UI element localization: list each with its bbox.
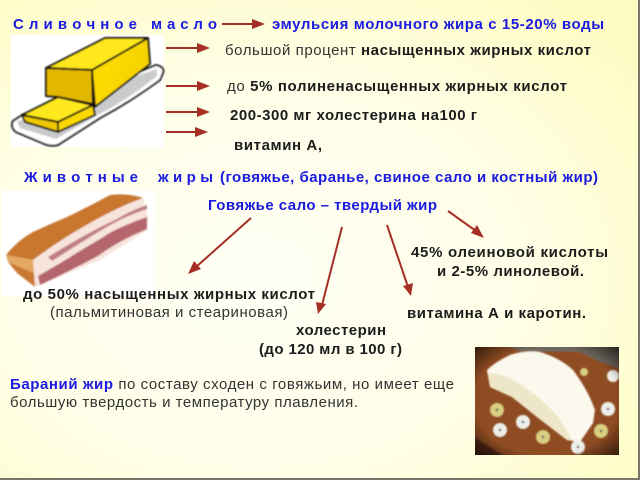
- text: up to 50 percent saturated acids: (пальмитиновая и стеариновая): [50, 304, 288, 321]
- image: mutton fat on a plate: [475, 345, 621, 456]
- text: cholesterol in tallow: [259, 322, 402, 358]
- heading: butter: [13, 16, 217, 33]
- heading: butter: С л и в о ч н о е: [13, 16, 137, 33]
- arrow: to saturated acids: [188, 218, 251, 274]
- subheading: beef tallow: Говяжье сало – твердый жир: [208, 197, 437, 214]
- arrow: to oleic acid: [448, 211, 484, 238]
- text: oleic and linoleic acids: [411, 244, 608, 280]
- text: cholesterol in butter: 200-300 мг холестерина на100 г: [230, 107, 477, 124]
- text: saturated acids: большой процент насыщенных жирных кислот: [225, 42, 591, 59]
- image: slab of lard: [1, 191, 155, 296]
- text: up to 50 percent saturated acids: [23, 286, 315, 321]
- arrow: to cholesterol: [316, 227, 342, 314]
- text: oleic and linoleic acids: 45% олеиновой кислоты: [411, 244, 608, 261]
- heading: animal fats: Ж и в о т н ы е: [23, 169, 138, 186]
- heading: emulsion definition: эмульсия молочного жира с 15-20% воды: [272, 16, 604, 33]
- arrow: butter fact 3: [166, 107, 210, 117]
- arrow: butter to emulsion: [222, 19, 265, 29]
- text: oleic and linoleic acids: и 2-5% линолевой.: [437, 263, 584, 280]
- text: vitamin A and carotene: витамина А и каротин.: [407, 305, 586, 322]
- arrow: butter fact 2: [166, 81, 210, 91]
- heading: butter: м а с л о: [151, 16, 217, 33]
- heading: animal fats: [23, 169, 598, 186]
- text: cholesterol in tallow: холестерин: [296, 322, 386, 339]
- arrow: butter fact 1: [166, 43, 210, 53]
- arrow: to vitamin A: [387, 225, 413, 296]
- text: vitamin A: витамин А,: [234, 137, 322, 154]
- text: cholesterol in tallow: (до 120 мл в 100 г): [259, 341, 402, 358]
- text: mutton fat: большую твердость и температуру плавления.: [10, 394, 358, 411]
- text: mutton fat: [10, 376, 454, 411]
- text: up to 50 percent saturated acids: до 50% насыщенных жирных кислот: [23, 286, 315, 303]
- text: polyunsaturated acids: до 5% полиненасыщенных жирных кислот: [227, 78, 567, 95]
- heading: animal fats: ж и р ы: [157, 169, 213, 186]
- image: butter on a dish: [11, 35, 164, 147]
- text: mutton fat: Бараний жир по составу сходен с говяжьим, но имеет еще: [10, 376, 454, 393]
- heading: animal fats: (говяжье, баранье, свиное сало и костный жир): [220, 169, 598, 186]
- arrow: butter fact 4: [166, 127, 208, 137]
